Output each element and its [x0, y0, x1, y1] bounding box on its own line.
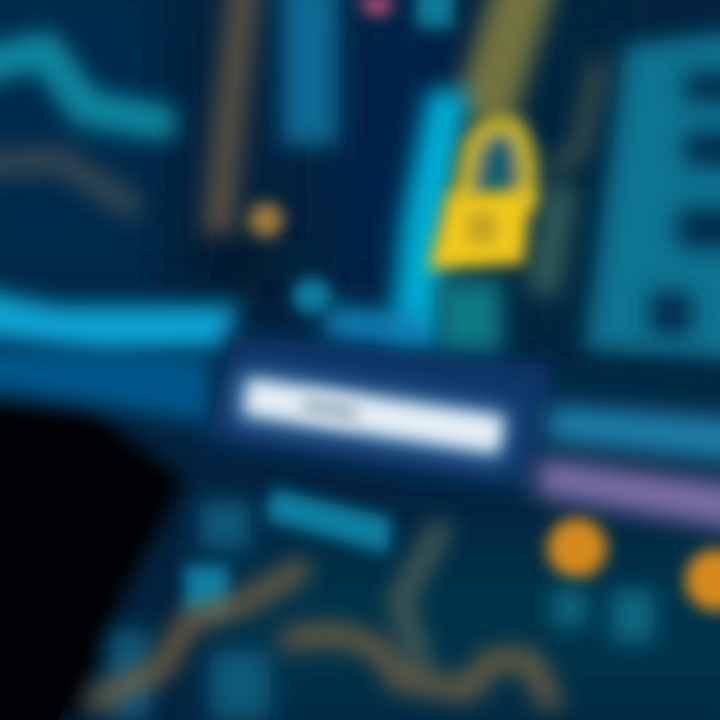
pink spot [361, 0, 393, 16]
orange node left [547, 518, 607, 578]
padlock shackle [460, 124, 528, 210]
panel: navy label box [205, 335, 555, 490]
dark slots in block [650, 72, 720, 334]
blue patch above bar [325, 305, 435, 350]
icon: yellow padlock [428, 124, 532, 270]
bottom brown circuit traces [95, 530, 550, 700]
bottom teal blocks [110, 500, 270, 720]
brown vertical trace [218, 0, 245, 235]
olive trace right of padlock [542, 185, 562, 295]
orange node right [685, 549, 720, 611]
cyan vertical bar [390, 90, 468, 342]
brown trace beside block [550, 60, 600, 170]
teal spot [416, 0, 454, 28]
padlock body [428, 190, 532, 270]
olive vertical trace [482, 0, 530, 120]
teal base below padlock [438, 280, 502, 355]
panel: right teal circuit block [585, 30, 720, 360]
teal spot at bar corner [292, 278, 332, 314]
top-left teal trace [0, 50, 160, 205]
blue band under left cyan band [0, 345, 215, 425]
small orange node [248, 202, 284, 238]
teal spots lower right [552, 590, 654, 642]
white label bar [236, 372, 510, 460]
blue square lower centre [185, 565, 229, 615]
purple band right [535, 458, 720, 532]
blue vertical block [282, 0, 338, 145]
blue band right [545, 403, 720, 465]
black lower-left corner [0, 398, 185, 720]
dark stripe right [570, 372, 628, 389]
left cyan band [0, 285, 240, 355]
teal bar below label [265, 488, 392, 554]
